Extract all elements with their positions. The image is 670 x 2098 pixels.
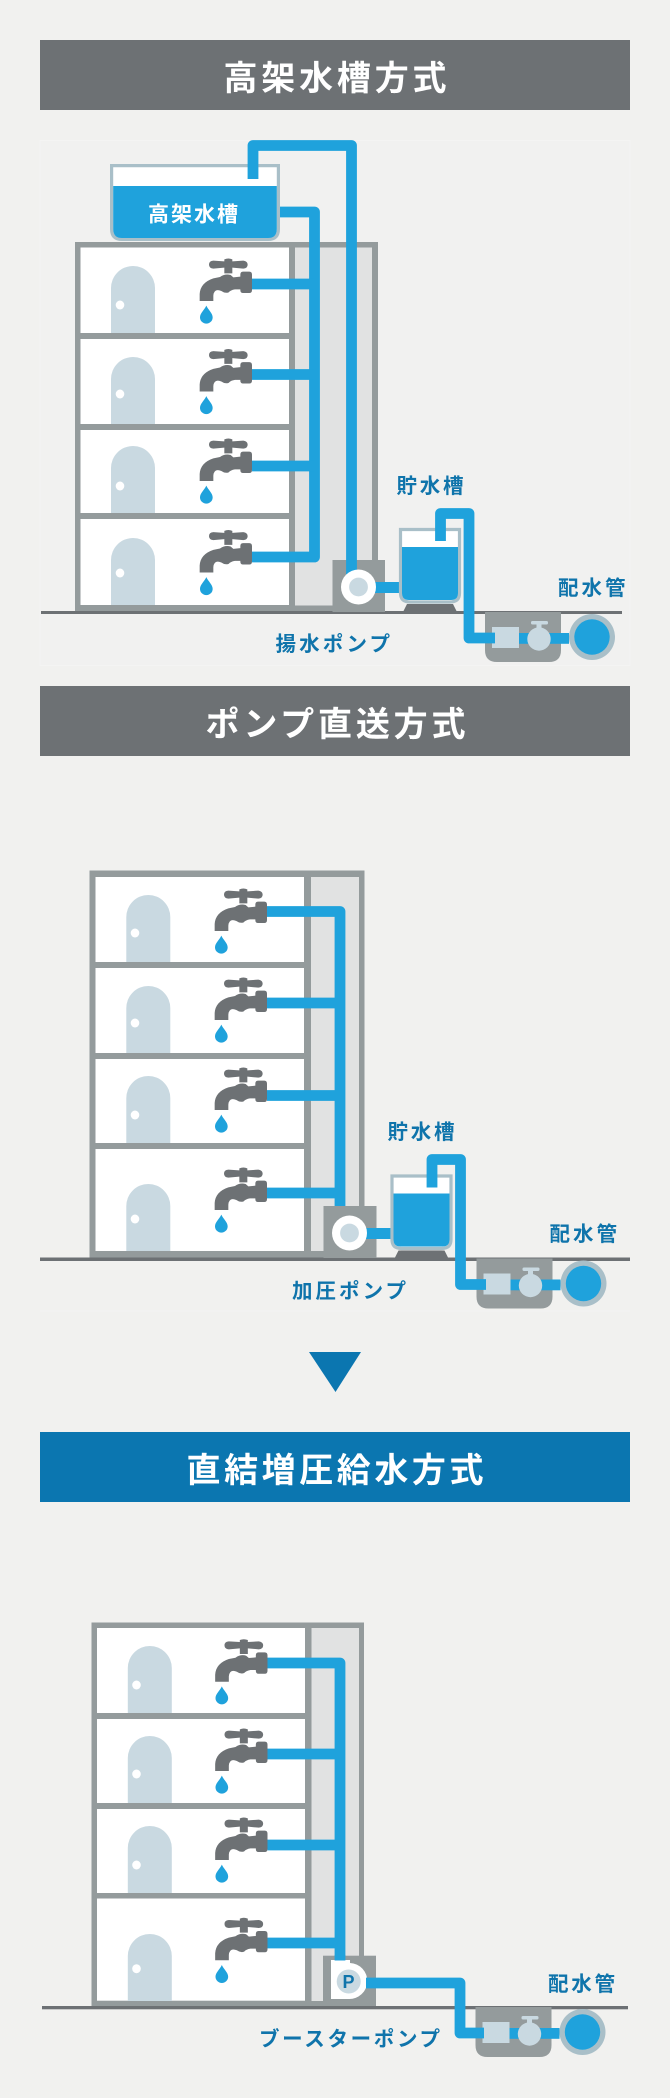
- building: [75, 242, 378, 613]
- pipe: booster pump to main: [366, 1983, 484, 2033]
- label: water main: 配水管: [550, 1223, 617, 1246]
- faucets: [200, 258, 252, 595]
- label: booster pump: ブースターポンプ: [259, 2027, 440, 2051]
- storage tank: [400, 530, 460, 612]
- heading: direct boost system: [40, 1432, 630, 1502]
- label: water main: 配水管: [558, 577, 626, 600]
- ground line: [41, 611, 622, 614]
- heading: elevated tank system: [40, 40, 630, 110]
- pipes to faucets: [268, 1663, 340, 1962]
- ground line: [42, 2006, 628, 2009]
- panel: direct boost system: [40, 1432, 630, 2057]
- pipe: main to storage tank: [432, 1160, 486, 1284]
- storage tank: [392, 1176, 451, 1258]
- label: water main: 配水管: [548, 1973, 615, 1996]
- heading: elevated tank system: 高架水槽方式: [224, 60, 446, 98]
- doors: [126, 895, 170, 1251]
- label: storage tank: 貯水槽: [388, 1120, 454, 1144]
- under-road equipment: [476, 1258, 606, 1308]
- building: [90, 870, 364, 1258]
- elevated tank: 高架水槽: [148, 204, 238, 226]
- heading: pump direct system: ポンプ直送方式: [206, 706, 466, 744]
- pump box: [332, 560, 385, 612]
- arrow: [309, 1352, 361, 1392]
- under-road equipment: [476, 2007, 606, 2057]
- booster pump: P: [342, 1972, 355, 1992]
- label: lift pump: 揚水ポンプ: [276, 633, 390, 656]
- booster pump: [323, 1955, 376, 2006]
- heading: pump direct system: [40, 686, 630, 756]
- pipes to faucets: [267, 912, 340, 1225]
- heading: direct boost system: 直結増圧給水方式: [186, 1452, 484, 1490]
- label: storage tank: 貯水槽: [396, 474, 464, 498]
- doors: [111, 266, 155, 605]
- pipe: tank to faucets: [252, 212, 314, 557]
- label: booster pump: 加圧ポンプ: [292, 1280, 406, 1303]
- faucets: [215, 1639, 267, 1983]
- pipe: storage tank to pump: [375, 582, 402, 593]
- pump: [341, 570, 376, 604]
- pipe: pump riser to elevated tank: [253, 146, 352, 575]
- pump: [332, 1216, 367, 1250]
- under-road equipment: [485, 612, 615, 662]
- building: [92, 1622, 364, 2007]
- panel: elevated tank system: [40, 40, 630, 666]
- ground line: [40, 1258, 630, 1261]
- elevated tank: [112, 166, 278, 239]
- pump box: [324, 1206, 376, 1258]
- faucets: [215, 888, 267, 1233]
- doors: [128, 1646, 172, 2001]
- pipe: main to storage tank: [440, 514, 495, 638]
- pipe: storage tank to pump: [366, 1228, 393, 1239]
- panel: pump direct system: [40, 686, 630, 1312]
